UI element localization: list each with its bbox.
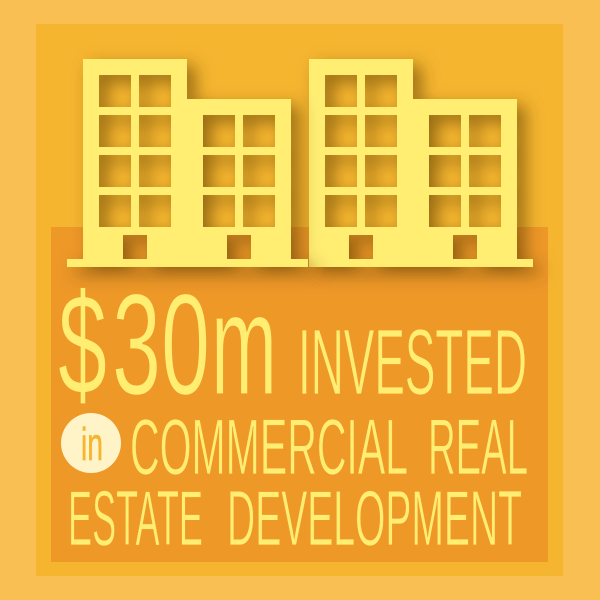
headline amount: m xyxy=(211,264,277,425)
text line: estate development: ESTATE xyxy=(68,474,203,562)
icon: left building pair xyxy=(67,59,308,267)
headline amount: 30 xyxy=(112,264,210,425)
badge: in xyxy=(61,413,121,473)
headline amount: $ xyxy=(58,264,107,425)
text line: estate development xyxy=(68,474,522,562)
icon: right building pair xyxy=(309,59,533,267)
badge: in: in xyxy=(81,418,103,470)
text panel xyxy=(51,227,548,562)
